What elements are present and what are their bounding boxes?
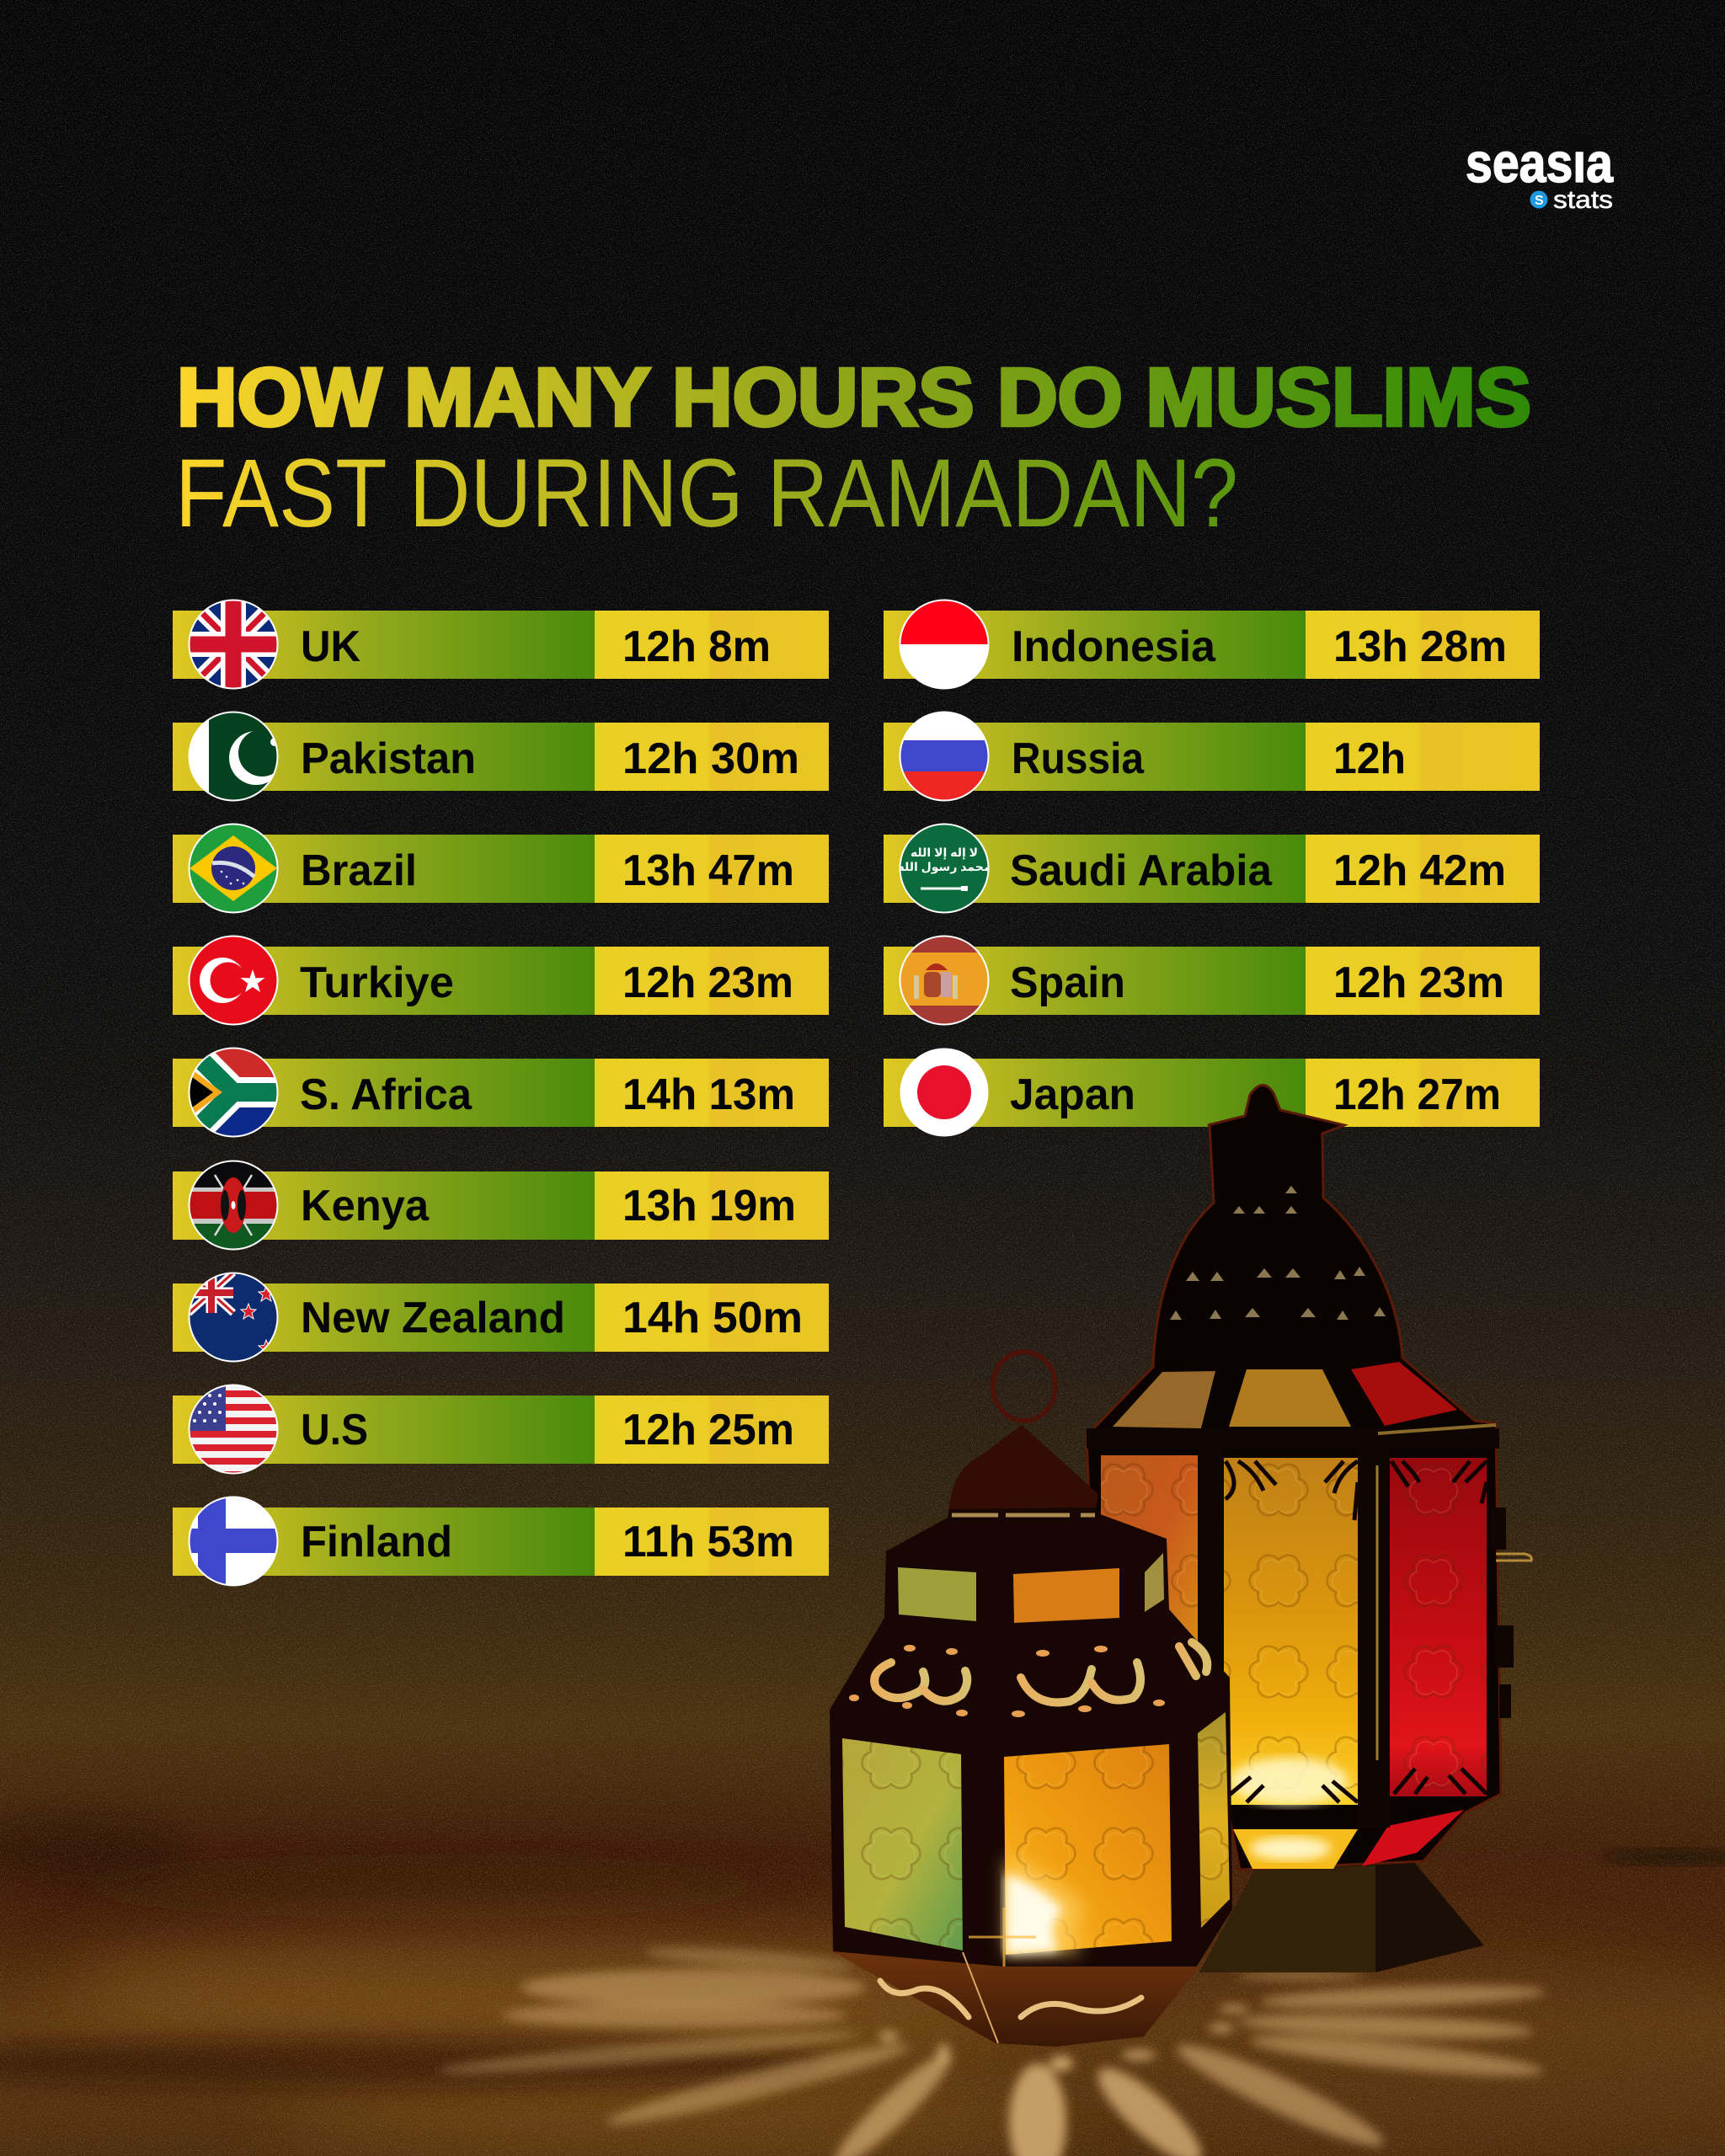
red door glass	[1390, 1458, 1487, 1796]
body silhouette	[830, 1425, 1232, 2047]
row: Spain	[884, 936, 1540, 1025]
row: Turkiye	[173, 936, 829, 1025]
lower tray glow	[1233, 1829, 1358, 1869]
row: New Zealand: New Zealand	[301, 1294, 565, 1342]
row: U.S: 12h 25m	[622, 1406, 794, 1454]
logo: seasia stats: seasia	[1466, 131, 1614, 194]
row: Spain: 12h 23m	[1333, 958, 1504, 1007]
row: New Zealand: 14h 50m	[622, 1294, 803, 1342]
row: Finland	[173, 1497, 829, 1586]
logo: seasia stats	[1466, 131, 1614, 214]
row: S. Africa: 14h 13m	[622, 1070, 795, 1119]
center glass	[1224, 1458, 1358, 1805]
row: Saudi Arabia: 12h 42m	[1333, 846, 1506, 895]
left column rows	[173, 600, 829, 1586]
row: S. Africa	[173, 1048, 829, 1137]
frame bars and hinges	[1087, 1428, 1514, 1828]
ornaments: shoulder crescents	[874, 1642, 1207, 1702]
floor light rays	[438, 1943, 1546, 2156]
row: Japan	[884, 1048, 1540, 1137]
logo: seasia stats: S	[1535, 194, 1544, 208]
lantern: back	[1087, 1085, 1531, 1972]
row: Saudi Arabia: محمد رسول الله	[897, 860, 991, 874]
row: Brazil: 13h 47m	[622, 846, 794, 895]
logo: seasia stats: stats	[1553, 186, 1613, 214]
row: Spain: Spain	[1010, 958, 1125, 1007]
row: Japan: Japan	[1010, 1070, 1135, 1119]
lantern base	[1199, 1855, 1484, 1972]
row: Kenya: Kenya	[301, 1182, 430, 1230]
row: New Zealand	[173, 1273, 829, 1362]
row: Pakistan: 12h 30m	[622, 734, 799, 783]
shoulder glass panels	[1113, 1371, 1215, 1428]
row: Finland: Finland	[301, 1518, 452, 1566]
row: Pakistan: Pakistan	[301, 734, 476, 783]
row: Saudi Arabia: لا إله إلا الله	[911, 846, 978, 860]
center glass	[1004, 1744, 1172, 1955]
ring handle	[993, 1352, 1055, 1421]
row: Kenya	[173, 1161, 829, 1251]
title: FAST DURING RAMADAN?	[175, 440, 1238, 547]
row: Brazil	[173, 824, 829, 913]
row: UK	[173, 600, 829, 689]
upper glass	[898, 1567, 976, 1621]
side glass left	[1101, 1455, 1198, 1649]
row: Saudi Arabia: Saudi Arabia	[1010, 846, 1273, 895]
row: U.S	[173, 1385, 829, 1478]
row: UK: UK	[301, 622, 360, 671]
row: Turkiye: Turkiye	[300, 958, 454, 1007]
row: Russia: 12h	[1333, 734, 1406, 783]
left glass	[842, 1738, 963, 1951]
row: Saudi Arabia	[884, 824, 1540, 913]
lantern dome and neck	[1087, 1085, 1501, 1870]
skirt ornaments	[880, 1981, 1141, 2017]
row: Indonesia: 13h 28m	[1333, 622, 1507, 671]
bottom skirt	[833, 1951, 1199, 2047]
title	[175, 351, 1531, 547]
row: UK: 12h 8m	[622, 622, 771, 671]
row: Russia: Russia	[1012, 734, 1145, 783]
row: S. Africa: S. Africa	[300, 1070, 473, 1119]
row: Russia	[884, 712, 1540, 801]
lantern: front	[830, 1352, 1232, 2047]
row: Indonesia: Indonesia	[1012, 622, 1216, 671]
row: Japan: 12h 27m	[1333, 1070, 1501, 1119]
right column rows	[884, 600, 1540, 1137]
row: Kenya: 13h 19m	[622, 1182, 796, 1230]
right glass	[1198, 1712, 1230, 1928]
row: Indonesia	[884, 600, 1540, 689]
row: Pakistan	[173, 712, 829, 801]
cap	[949, 1425, 1098, 1509]
row: U.S: U.S	[301, 1406, 368, 1454]
light flare	[969, 1857, 1087, 1967]
row: Brazil: Brazil	[301, 846, 417, 895]
row: Finland: 11h 53m	[622, 1518, 794, 1566]
title: HOW MANY HOURS DO MUSLIMS	[177, 351, 1531, 443]
row: Turkiye: 12h 23m	[622, 958, 793, 1007]
lace corners	[1226, 1461, 1487, 1802]
